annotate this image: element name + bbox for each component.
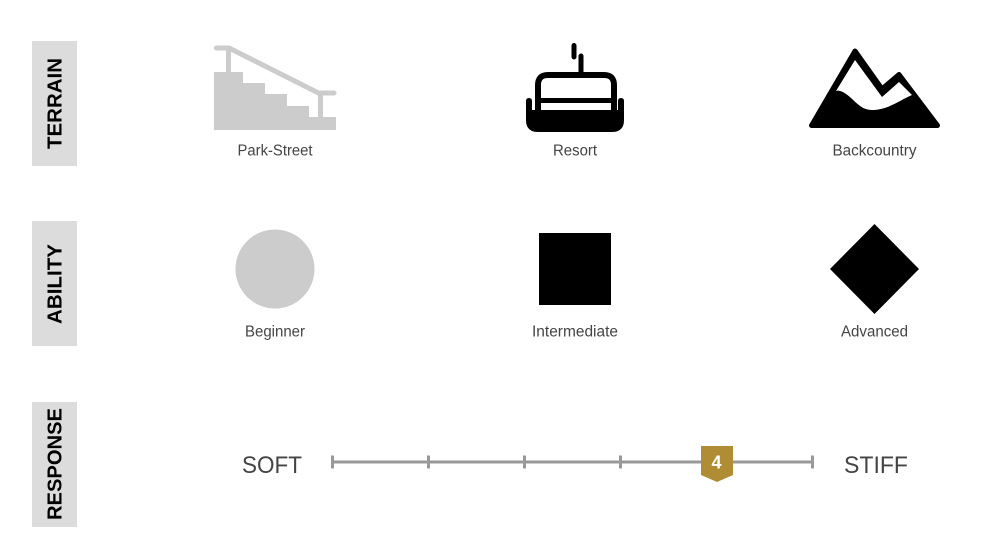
marker: value 4: 4 [711,452,722,472]
icon: intermediate square [539,233,611,305]
panel: response row [32,402,908,527]
heading: terrain [32,41,77,166]
heading: response: RESPONSE [44,408,66,520]
icon: resort chairlift [526,46,624,132]
chart: response scale [332,446,813,482]
label: beginner: Beginner [245,324,305,340]
label: stiff: STIFF [844,452,908,479]
panel: terrain row [32,41,938,166]
icon: park-street stairs [214,48,336,130]
label: backcountry: Backcountry [832,142,917,160]
label: advanced: Advanced [841,324,908,340]
heading: ability [32,221,77,346]
label: park-street: Park-Street [238,142,313,160]
heading: ability: ABILITY [44,243,66,324]
label: intermediate: Intermediate [532,324,618,340]
label: soft: SOFT [242,452,302,479]
marker: value 4 [701,446,733,482]
panel: ability row [32,221,919,346]
label: resort: Resort [553,142,598,160]
icon: backcountry mountains [812,51,938,126]
icon: beginner circle [236,230,314,308]
heading: terrain: TERRAIN [44,58,66,149]
heading: response [32,402,77,527]
icon: advanced diamond [830,224,919,314]
